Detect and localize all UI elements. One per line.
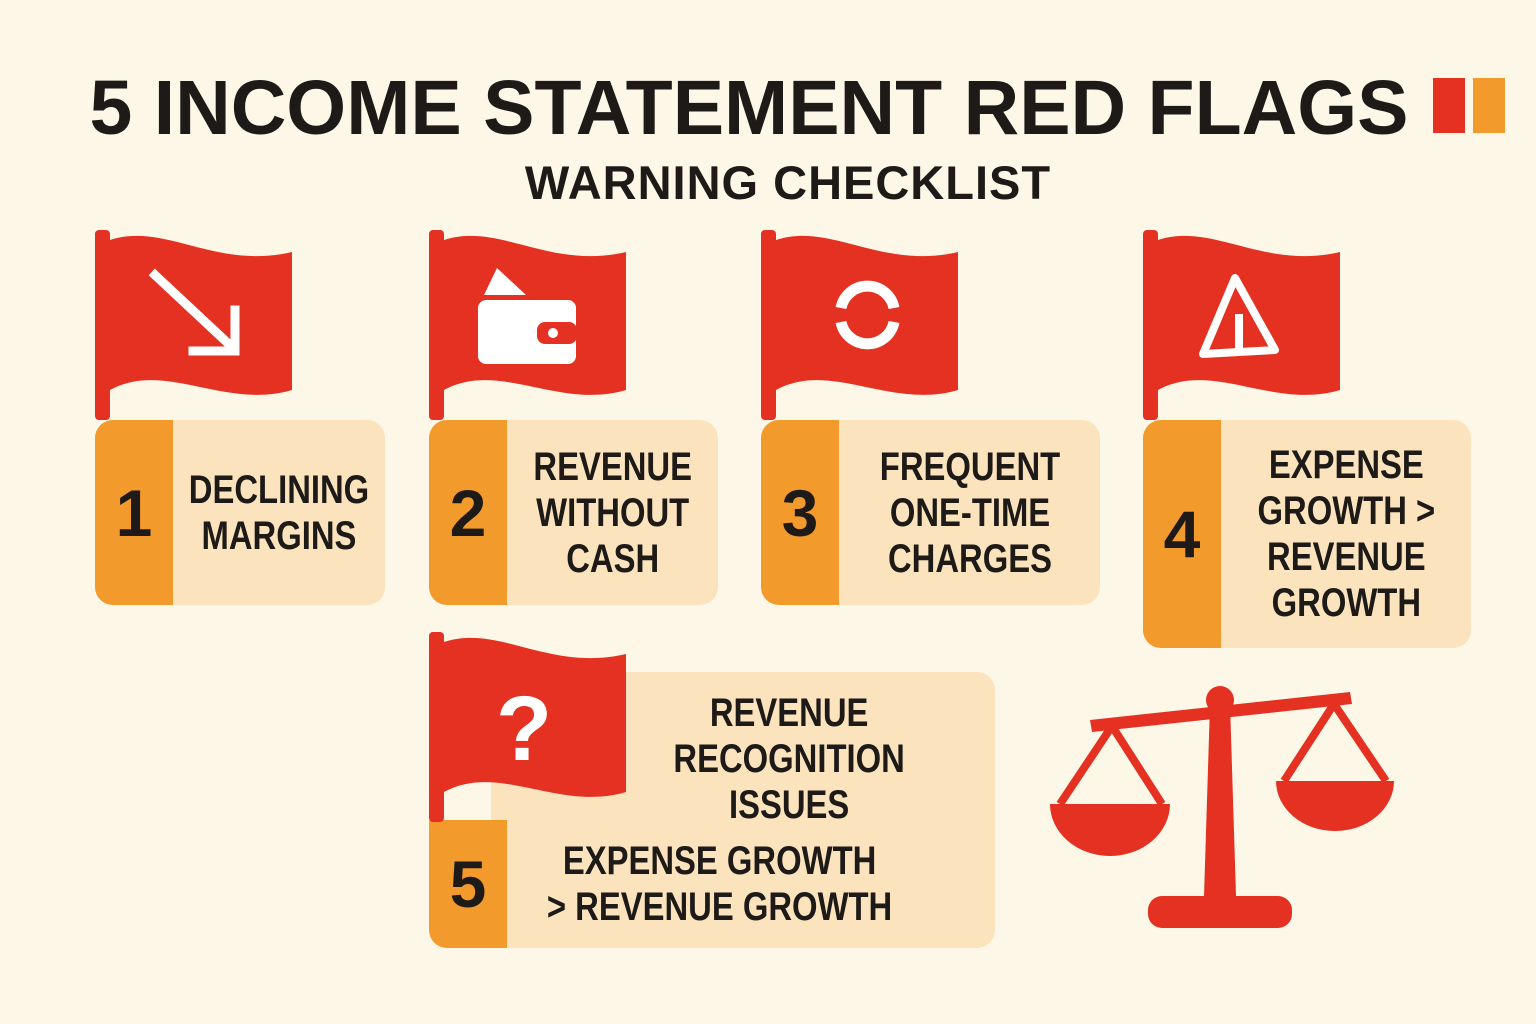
icon: balance scale [1050,686,1394,928]
card 2: REVENUE [533,444,692,488]
card 3: CHARGES [887,536,1052,580]
card 5 [429,672,995,948]
text: expense growth: > REVENUE GROWTH [547,885,892,929]
flag 2 [429,230,626,420]
card 3: 3 [782,476,818,550]
card 2: CASH [566,536,659,580]
card 5: 5 [450,847,486,921]
card 3: FREQUENT [879,444,1060,488]
text: revenue recognition issues: ISSUES [729,783,849,827]
icon: question mark: ? [496,678,552,780]
card 3: ONE-TIME [889,490,1050,534]
title: 5 INCOME STATEMENT RED FLAGS [89,65,1408,151]
flag 1 [95,230,292,420]
card 1: 1 [116,476,152,550]
card 2: WITHOUT [536,490,689,534]
icon: title color squares [1433,78,1505,133]
card 3 [761,420,1100,605]
icon: wallet [478,268,577,364]
subtitle: WARNING CHECKLIST [525,156,1051,209]
card 4: EXPENSE [1269,443,1423,487]
icon: arrow down-right [155,275,235,351]
text: revenue recognition issues: RECOGNITION [673,737,905,781]
card 4: 4 [1164,497,1200,571]
icon: warning triangle [1203,278,1275,354]
card 1: MARGINS [202,514,356,558]
text: revenue recognition issues: REVENUE [710,691,868,735]
card 4: GROWTH > [1257,489,1435,533]
flag 3 [761,230,958,420]
text: revenue recognition issues [673,691,905,827]
card 2: 2 [450,476,486,550]
text: expense growth: EXPENSE GROWTH [563,839,876,883]
flag 4 [1143,230,1340,420]
card 4: REVENUE [1267,535,1425,579]
text: expense growth [547,839,892,929]
card 1: DECLINING [189,468,369,512]
card 4 [1143,420,1471,648]
card 4: GROWTH [1271,581,1421,625]
icon: cycle [841,286,894,344]
flag 5 [429,632,626,822]
card 2 [429,420,718,605]
card 1 [95,420,385,605]
